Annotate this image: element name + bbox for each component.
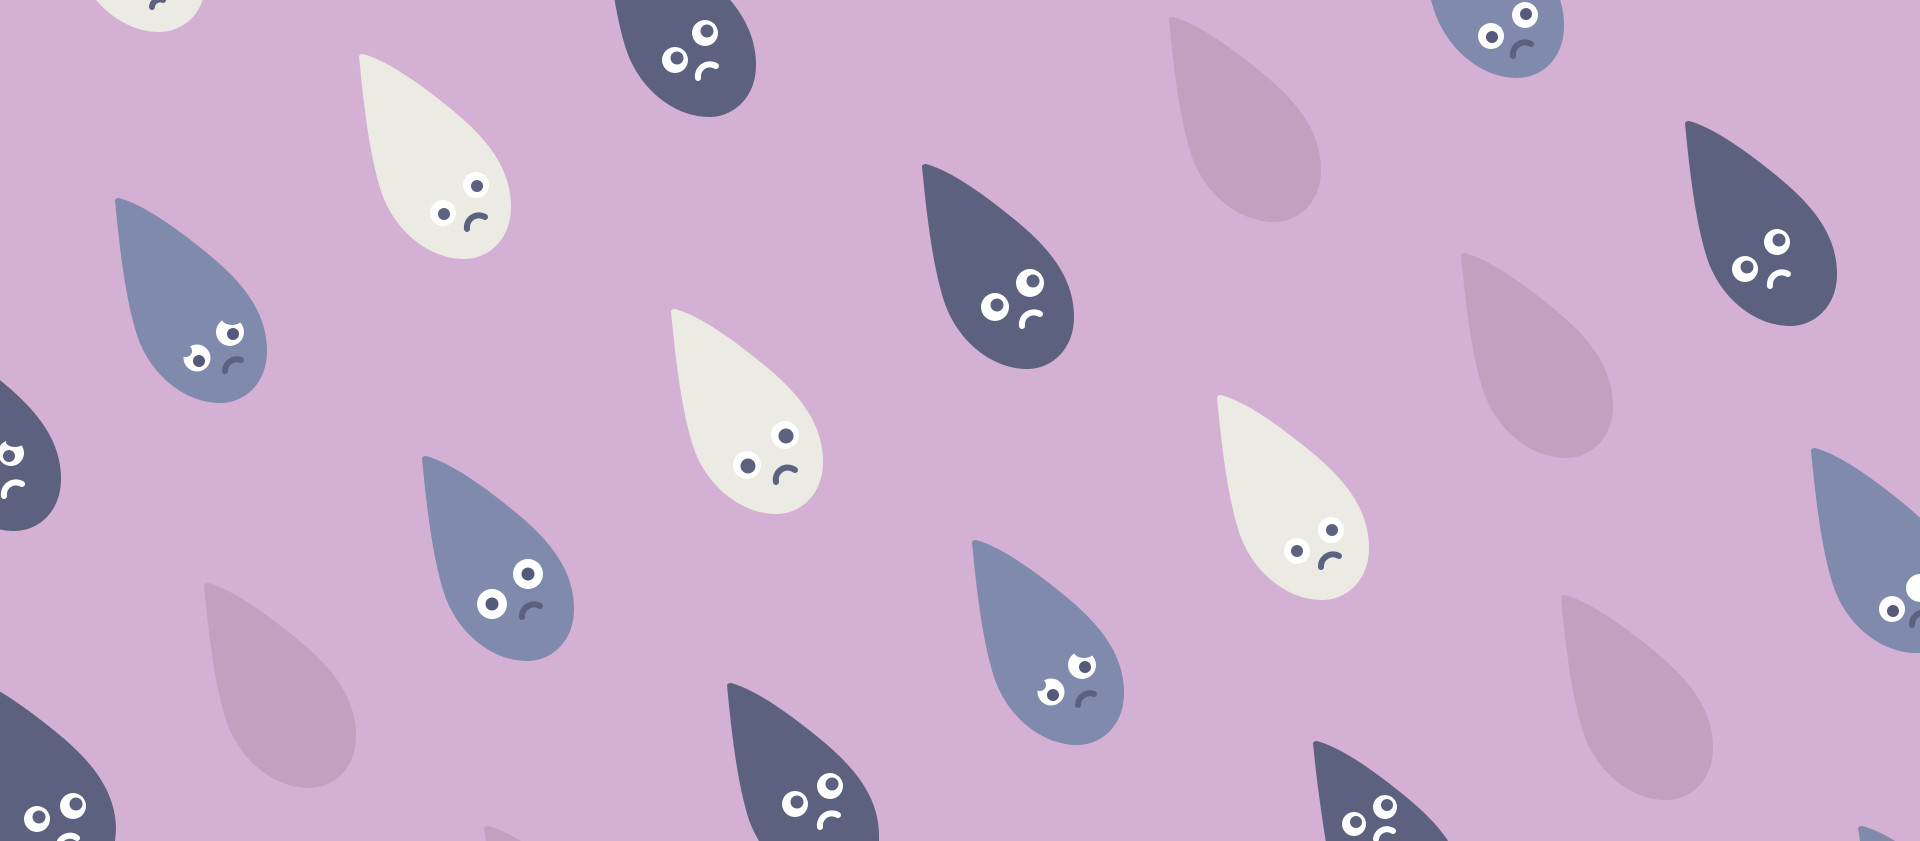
drop: faded sliver at bottom [484, 826, 521, 841]
drop: dark top centre [604, 0, 756, 117]
drop: blue lower centre [972, 540, 1124, 745]
drop: faded lower right [1561, 595, 1713, 800]
drop: faded right centre [1461, 253, 1613, 458]
drop: cream centre [671, 309, 823, 514]
drop: cream top left [54, 0, 206, 32]
drop: blue lower left [422, 456, 574, 661]
drop: blue sliver at bottom right [1858, 826, 1895, 841]
drop: blue left [115, 198, 267, 403]
drop: dark bottom centre [727, 683, 879, 841]
drop: cream right centre [1217, 395, 1369, 600]
drop: blue top right [1412, 0, 1564, 78]
drop: faded top centre [1169, 17, 1321, 222]
drop: dark centre [922, 164, 1074, 369]
drop: dark bottom right [1313, 741, 1448, 841]
drop: dark upper right [1685, 121, 1837, 326]
drop: blue right edge [1811, 448, 1920, 653]
drop: cream upper left [359, 54, 511, 259]
drop: dark bottom left [0, 677, 116, 841]
drop: faded lower left [204, 583, 356, 788]
drop: dark left edge [0, 326, 61, 531]
